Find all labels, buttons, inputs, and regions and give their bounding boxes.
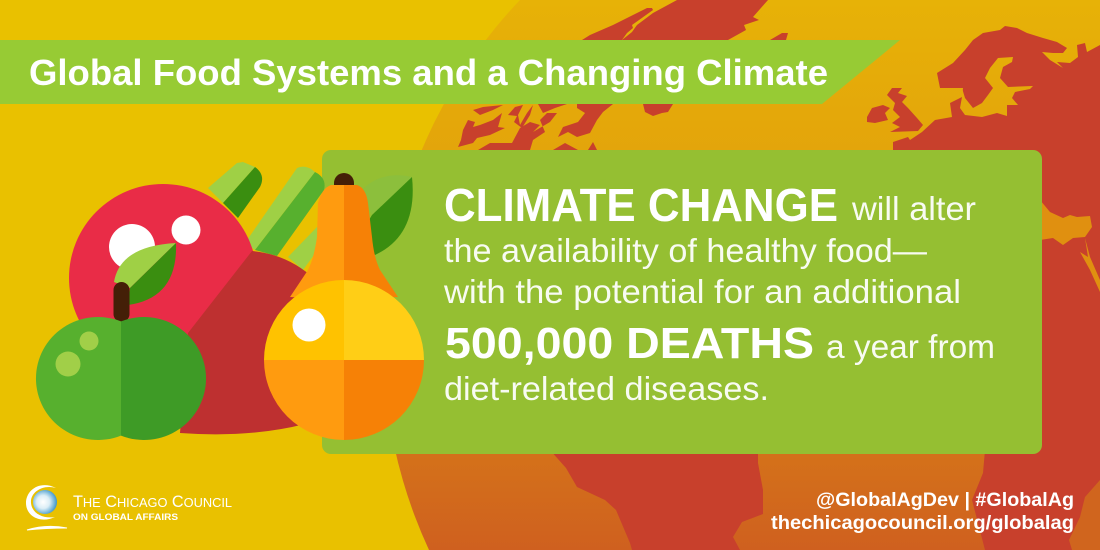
- text block: main message: will alter: [851, 190, 976, 227]
- icon: beet stalk two: [245, 167, 325, 256]
- highlight: [109, 224, 155, 270]
- text block: main message: the availability of healthy food—: [444, 232, 927, 269]
- footer: social and web links: @GlobalAgDev | #GlobalAg: [816, 490, 1074, 511]
- map: Africa east and Middle East: [972, 145, 1100, 550]
- logo: The Chicago Council: [26, 485, 232, 530]
- map: Red Sea: [1080, 238, 1100, 292]
- icon: beet stalk three: [288, 227, 325, 270]
- icon: green apple: [36, 317, 206, 440]
- icon: pear stem: [334, 173, 354, 190]
- icon: apple leaf: [114, 243, 176, 305]
- map: Great Britain: [887, 88, 923, 132]
- map: Baltic Sea: [960, 57, 1033, 117]
- text block: main message: with the potential for an additional: [443, 273, 961, 310]
- icon: back leaf: [360, 175, 413, 255]
- icon: pear: [264, 185, 424, 440]
- illustration: fruit and vegetables: [36, 162, 424, 440]
- map: Greenland: [582, 0, 788, 116]
- title: Global Food Systems and a Changing Climate: [29, 52, 828, 93]
- icon: beet: [69, 184, 310, 434]
- text block: main message: CLIMATE CHANGE: [444, 179, 838, 231]
- map: Mediterranean: [1040, 200, 1092, 245]
- logo name: THE CHICAGO COUNCIL: [73, 493, 232, 511]
- logo subtitle: ON GLOBAL AFFAIRS: [73, 512, 178, 523]
- icon: beet stalk one: [208, 162, 262, 218]
- globe: [383, 0, 1100, 550]
- text block: main message: 500,000 DEATHS: [445, 319, 814, 368]
- map: Ireland: [867, 105, 890, 123]
- map: Africa west: [550, 450, 763, 550]
- panel: message: [322, 150, 1042, 454]
- text block: main message: a year from: [826, 328, 995, 365]
- icon: apple stem: [114, 282, 130, 322]
- footer: social and web links: [771, 490, 1074, 534]
- title banner: [0, 40, 900, 104]
- icon: logo globe: [26, 485, 67, 530]
- text block: main message: [443, 179, 995, 407]
- highlight: [172, 216, 200, 244]
- text block: main message: diet-related diseases.: [444, 370, 769, 407]
- map: Arctic islands: [458, 104, 613, 150]
- map: Indian Ocean: [1069, 480, 1100, 550]
- map: Europe and Asia: [893, 26, 1100, 160]
- footer: social and web links: thechicagocouncil.org/globalag: [771, 513, 1074, 534]
